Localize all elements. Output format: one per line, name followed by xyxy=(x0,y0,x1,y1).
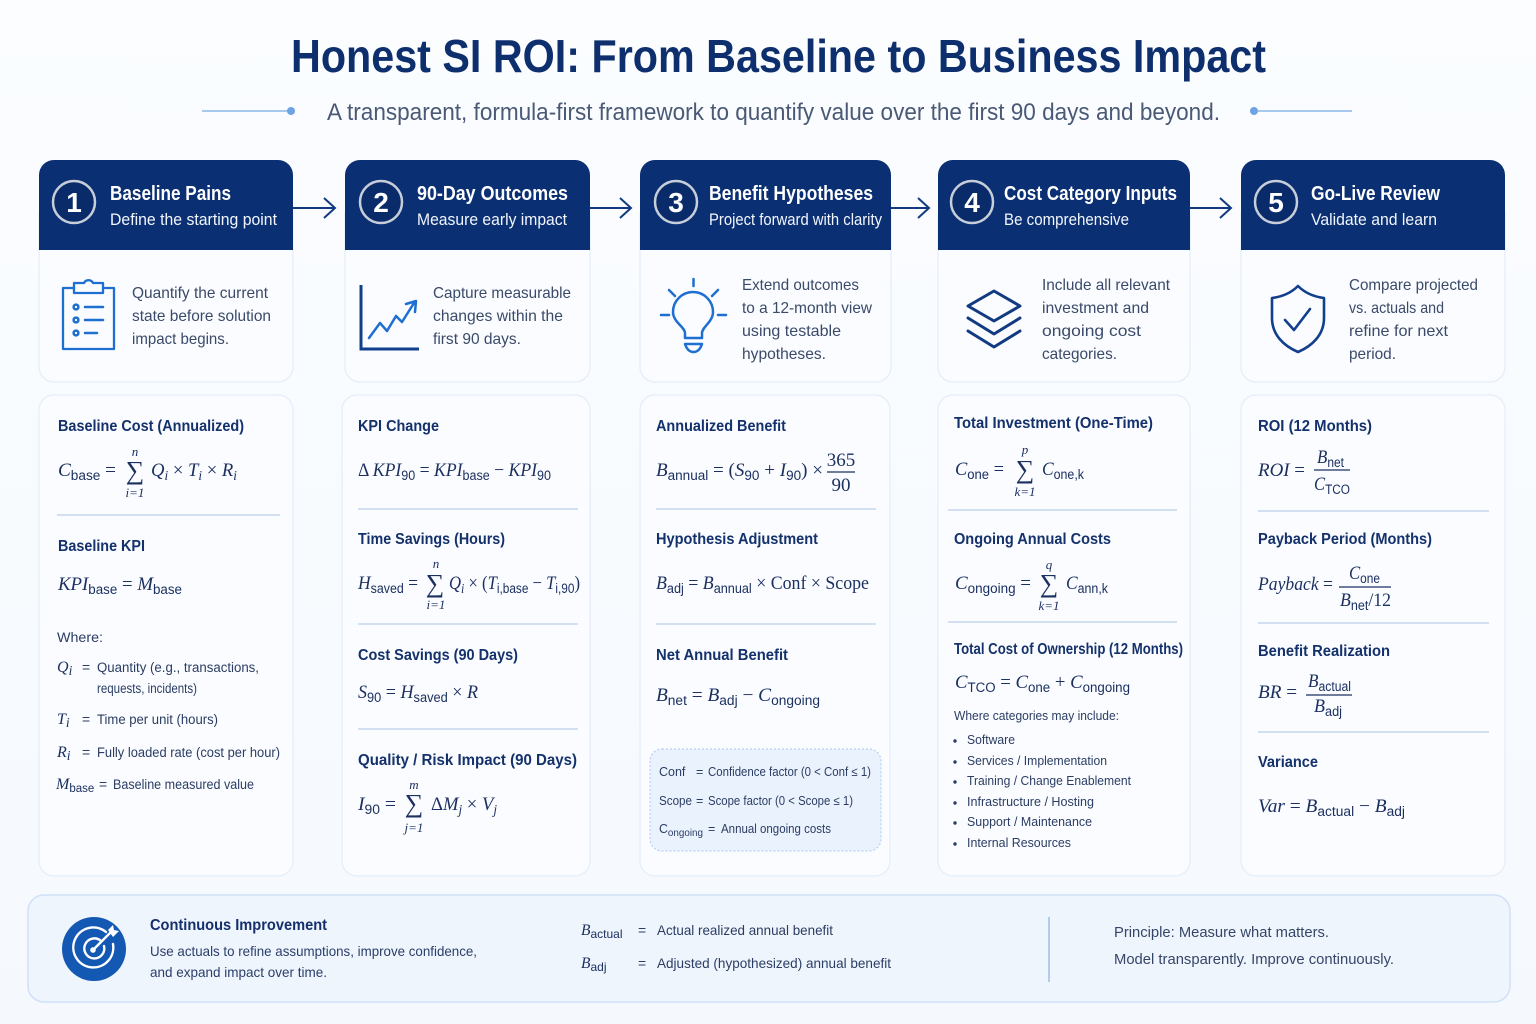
step 2 heading: 90-Day Outcomes xyxy=(417,183,568,205)
step 5 description xyxy=(1349,277,1478,363)
definitions list: i xyxy=(66,715,70,730)
formula: variance: adj xyxy=(1387,804,1405,819)
callout: factor definitions: Scope factor (0 < Scope ≤ 1) xyxy=(708,794,853,808)
formula: KPI change: 90 xyxy=(537,468,551,483)
category list: Where categories may include: xyxy=(954,709,1119,723)
step 5 description: refine for next xyxy=(1349,323,1449,340)
footer heading: Continuous Improvement xyxy=(150,917,327,934)
heading: Variance: Variance xyxy=(1258,754,1318,771)
icon: light bulb xyxy=(661,279,726,352)
heading: Total Cost of Ownership: Total Cost of Ownership (12 Months) xyxy=(954,641,1183,658)
formula: total investment: p xyxy=(1021,442,1029,457)
step 4 description xyxy=(1042,277,1171,363)
step 4 description: categories. xyxy=(1042,346,1117,363)
category list xyxy=(953,709,1132,850)
callout: factor definitions: ongoing xyxy=(668,828,703,839)
formula: hypothesis adjustment: = xyxy=(684,573,703,594)
formula: total cost of ownership: one xyxy=(1028,680,1050,695)
formula: time savings: Q xyxy=(449,573,461,594)
formula: baseline cost: i=1 xyxy=(126,485,144,500)
formula: baseline cost: base xyxy=(71,468,100,483)
footer legend: = xyxy=(638,922,646,938)
formula: net annual benefit: C xyxy=(758,685,771,706)
step 3 description: to a 12-month view xyxy=(742,300,872,317)
formula: time savings: H xyxy=(357,573,372,594)
step 2 card: 90-Day Outcomes xyxy=(345,160,590,382)
step 4 description: investment and xyxy=(1042,300,1149,317)
definitions list: M xyxy=(55,776,71,793)
formula: cost savings: saved xyxy=(414,690,448,705)
formula: benefit realization: B xyxy=(1308,671,1319,692)
formula: ongoing annual costs: ann,k xyxy=(1078,581,1108,596)
category list: Software xyxy=(967,733,1015,747)
formula: time savings: T xyxy=(488,573,498,594)
formula: annualized benefit: B xyxy=(656,460,668,481)
formula: baseline cost: Q xyxy=(151,460,165,481)
formula: ongoing annual costs: ongoing xyxy=(968,581,1016,596)
formula: ROI: B xyxy=(1317,447,1328,468)
formula: quality risk impact: m xyxy=(409,777,419,792)
panel: cost formulas xyxy=(938,395,1190,876)
definitions list: Time per unit (hours) xyxy=(97,712,218,727)
formula: baseline cost: n xyxy=(132,444,138,459)
step 1 description: state before solution xyxy=(132,308,271,325)
formula: total cost of ownership: = xyxy=(996,672,1016,693)
formula: ongoing annual costs: k=1 xyxy=(1038,598,1060,613)
formula: total investment: C xyxy=(955,459,968,480)
step 1 description: Quantify the current xyxy=(132,285,269,302)
formula: baseline KPI: M xyxy=(136,574,154,595)
formula: cost savings: S xyxy=(358,682,367,703)
definitions list: Q xyxy=(57,659,69,676)
step 3 description: Extend outcomes xyxy=(742,277,859,294)
formula: cost savings: H xyxy=(400,682,415,703)
formula: total investment xyxy=(955,442,1084,499)
formula: net annual benefit: − xyxy=(738,685,758,706)
formula: KPI change: KPI xyxy=(508,460,539,481)
formula: ROI: C xyxy=(1314,474,1325,495)
definitions list: Quantity (e.g., transactions, xyxy=(97,660,259,675)
formula: time savings: i=1 xyxy=(427,597,445,612)
footer description: Use actuals to refine assumptions, improve confidence, xyxy=(150,943,477,959)
heading: Cost Savings: Cost Savings (90 Days) xyxy=(358,647,518,664)
formula: annualized benefit: I xyxy=(779,460,788,481)
formula: ongoing annual costs: = xyxy=(1016,573,1031,594)
arrow 2 to 3 xyxy=(590,198,631,218)
formula: payback: one xyxy=(1360,571,1380,586)
formula: time savings: i,90 xyxy=(555,581,574,596)
panel: 90-day formulas xyxy=(342,395,590,876)
formula: baseline cost: C xyxy=(58,460,71,481)
number badge 4: 4 xyxy=(964,187,980,218)
formula: benefit realization xyxy=(1258,671,1352,719)
arrow 1 to 2 xyxy=(293,198,335,218)
formula: annualized benefit: annual xyxy=(668,468,708,483)
formula: annualized benefit: = ( xyxy=(708,460,735,481)
definitions list: = xyxy=(82,659,90,675)
formula: total investment: k=1 xyxy=(1014,484,1036,499)
formula: benefit realization: adj xyxy=(1325,704,1342,719)
formula: payback xyxy=(1257,563,1391,613)
formula: benefit realization: B xyxy=(1314,696,1325,717)
formula: ongoing annual costs: C xyxy=(955,573,968,594)
step 1 heading: Baseline Pains xyxy=(110,183,231,205)
step 4 card: Cost Category Inputs xyxy=(938,160,1190,382)
formula: payback: net xyxy=(1351,598,1369,613)
principle statement: Principle: Measure what matters. xyxy=(1114,924,1329,941)
number badge 4 xyxy=(951,181,993,223)
step 1 description xyxy=(132,285,271,348)
formula: baseline cost: i xyxy=(198,468,202,483)
category list: Training / Change Enablement xyxy=(967,774,1132,788)
definitions list: = xyxy=(99,776,107,792)
formula: KPI change: = xyxy=(415,460,434,481)
footer legend: B xyxy=(581,922,591,939)
formula: time savings: T xyxy=(546,573,557,594)
step 5 description: period. xyxy=(1349,346,1396,363)
footer legend: Actual realized annual benefit xyxy=(657,922,833,938)
formula: quality risk impact: V xyxy=(482,794,496,815)
definitions list: T xyxy=(57,711,67,728)
formula: cost savings: = xyxy=(381,682,401,703)
formula: net annual benefit: B xyxy=(707,685,720,706)
definitions list xyxy=(55,629,280,795)
formula: time savings: × ( xyxy=(464,573,488,594)
formula: variance: actual xyxy=(1317,804,1354,819)
formula: KPI change: KPI xyxy=(433,460,464,481)
formula: annualized benefit: 90 xyxy=(744,468,759,483)
step 5 heading: Go-Live Review xyxy=(1311,183,1440,205)
formula: benefit realization: BR = xyxy=(1258,682,1297,703)
step 2 description: Capture measurable xyxy=(433,285,571,302)
formula: baseline KPI: KPI xyxy=(57,574,90,595)
formula: annualized benefit: 90 xyxy=(786,468,801,483)
formula: KPI change: − xyxy=(490,460,509,481)
callout: factor definitions: = xyxy=(696,794,703,808)
step 5 subheading: Validate and learn xyxy=(1311,211,1437,229)
callout: factor definitions: Scope xyxy=(659,794,692,808)
number badge 3 xyxy=(655,181,697,223)
formula: KPI change: Δ KPI xyxy=(358,460,403,481)
formula: cost savings: 90 xyxy=(367,690,381,705)
icon: rising line chart xyxy=(361,285,419,349)
heading: Ongoing Annual Costs: Ongoing Annual Costs xyxy=(954,531,1111,548)
formula: payback: /12 xyxy=(1368,590,1391,611)
formula: total cost of ownership: TCO xyxy=(968,680,996,695)
formula: cost savings: R xyxy=(466,682,478,703)
formula: baseline KPI: base xyxy=(153,582,182,597)
formula: hypothesis adjustment: B xyxy=(656,573,667,594)
formula: net annual benefit: B xyxy=(656,685,668,706)
formula: total cost of ownership: + xyxy=(1050,672,1070,693)
formula: baseline cost: × xyxy=(168,460,188,481)
formula: ROI: ROI = xyxy=(1257,460,1305,481)
formula: baseline cost: × xyxy=(202,460,222,481)
formula: baseline KPI: = xyxy=(117,574,137,595)
formula: time savings: ∑ xyxy=(426,569,444,598)
formula: baseline cost: i xyxy=(233,468,237,483)
formula: quality risk impact: = xyxy=(380,794,396,815)
definitions list: R xyxy=(56,744,67,761)
callout: factor definitions: C xyxy=(659,822,668,836)
formula: ongoing annual costs xyxy=(955,557,1108,613)
formula: annualized benefit: 365 xyxy=(827,450,855,471)
formula: payback: C xyxy=(1349,563,1360,584)
heading: KPI Change: KPI Change xyxy=(358,418,439,435)
formula: payback: B xyxy=(1340,590,1351,611)
icon: target with arrow xyxy=(62,917,126,981)
formula: quality risk impact: × xyxy=(462,794,482,815)
formula: annualized benefit: S xyxy=(735,460,745,481)
callout: factor definitions: Confidence factor (0 < Conf ≤ 1) xyxy=(708,765,871,779)
formula: total cost of ownership: ongoing xyxy=(1083,680,1130,695)
formula: net annual benefit: adj xyxy=(719,693,738,708)
step 3 description: hypotheses. xyxy=(742,346,826,363)
panel: benefit formulas xyxy=(640,395,890,876)
heading: Baseline Cost: Baseline Cost (Annualized) xyxy=(58,418,244,435)
footer description: and expand impact over time. xyxy=(150,964,327,980)
step 5 card: Go-Live Review xyxy=(1241,160,1505,382)
definitions list: Where: xyxy=(57,629,103,645)
category list: Support / Maintenance xyxy=(967,815,1092,829)
formula: time savings: saved xyxy=(371,581,404,596)
principle statement: Model transparently. Improve continuously. xyxy=(1114,951,1394,968)
formula: total investment: one xyxy=(967,467,989,482)
step 4 heading: Cost Category Inputs xyxy=(1004,183,1177,205)
definitions list: Baseline measured value xyxy=(113,777,254,792)
formula: quality risk impact xyxy=(357,777,497,835)
formula: ongoing annual costs: C xyxy=(1066,573,1078,594)
footer legend: Adjusted (hypothesized) annual benefit xyxy=(657,955,891,971)
formula: baseline cost: T xyxy=(188,460,200,481)
step 3 subheading: Project forward with clarity xyxy=(709,211,883,229)
number badge 3: 3 xyxy=(668,187,684,218)
step 3 card: Benefit Hypotheses xyxy=(640,160,891,382)
step 5 description: Compare projected xyxy=(1349,277,1478,294)
formula: annualized benefit: ) × xyxy=(801,460,823,481)
formula: ROI: TCO xyxy=(1325,482,1350,497)
formula: time savings: i,base xyxy=(497,581,528,596)
formula: variance: B xyxy=(1375,796,1387,817)
formula: time savings: n xyxy=(433,556,439,571)
heading: Annualized Benefit: Annualized Benefit xyxy=(656,418,787,435)
step 1 card: Baseline Pains xyxy=(39,160,293,382)
formula: baseline cost: = xyxy=(100,460,116,481)
formula: hypothesis adjustment: adj xyxy=(667,581,684,596)
footer legend: adj xyxy=(590,960,606,974)
formula: baseline KPI: base xyxy=(88,582,117,597)
subtitle: A transparent, formula-first framework to quantify value over the first 90 days and beyond. xyxy=(327,99,1220,126)
heading: Payback Period: Payback Period (Months) xyxy=(1258,531,1432,548)
formula: hypothesis adjustment: × Conf × Scope xyxy=(752,573,869,594)
formula: ROI: net xyxy=(1327,455,1344,470)
number badge 2 xyxy=(360,181,402,223)
footer legend: actual xyxy=(590,927,622,941)
category list: Infrastructure / Hosting xyxy=(967,795,1094,809)
step 2 description: changes within the xyxy=(433,308,563,325)
formula: annualized benefit xyxy=(656,450,855,496)
formula: baseline cost: ∑ xyxy=(126,456,144,485)
definitions list: = xyxy=(82,744,90,760)
formula: cost savings: × xyxy=(448,682,467,703)
formula: ROI xyxy=(1257,447,1350,497)
formula: hypothesis adjustment: annual xyxy=(714,581,752,596)
formula: net annual benefit: ongoing xyxy=(771,693,820,708)
formula: ongoing annual costs: ∑ xyxy=(1040,569,1058,598)
formula: baseline cost: R xyxy=(221,460,234,481)
formula: baseline cost xyxy=(58,444,237,500)
formula: annualized benefit: + xyxy=(759,460,780,481)
formula: KPI change: base xyxy=(463,468,490,483)
formula: total cost of ownership: C xyxy=(1016,672,1028,693)
callout: factor definitions: = xyxy=(696,765,703,779)
number badge 1: 1 xyxy=(66,187,82,218)
heading: Hypothesis Adjustment: Hypothesis Adjustment xyxy=(656,531,819,548)
heading: Baseline KPI: Baseline KPI xyxy=(58,538,145,555)
number badge 2: 2 xyxy=(373,187,389,218)
step 4 description: Include all relevant xyxy=(1042,277,1171,294)
formula: quality risk impact: ∑ xyxy=(405,789,423,818)
formula: quality risk impact: I xyxy=(357,794,366,815)
formula: total cost of ownership: C xyxy=(1070,672,1083,693)
number badge 1 xyxy=(53,181,95,223)
formula: ongoing annual costs: q xyxy=(1046,557,1053,572)
footer description xyxy=(150,943,477,980)
footer legend: B xyxy=(581,955,591,972)
title: Honest SI ROI: From Baseline to Business Impact xyxy=(291,30,1266,82)
definitions list: i xyxy=(67,748,71,763)
formula: KPI change: 90 xyxy=(401,468,415,483)
footer banner: continuous improvement xyxy=(28,895,1510,1002)
step 3 heading: Benefit Hypotheses xyxy=(709,183,873,205)
heading: Time Savings: Time Savings (Hours) xyxy=(358,531,505,548)
step 1 description: impact begins. xyxy=(132,331,229,348)
heading: Net Annual Benefit: Net Annual Benefit xyxy=(656,647,789,664)
formula: benefit realization: actual xyxy=(1318,679,1351,694)
footer legend xyxy=(581,922,891,974)
formula: time savings: i xyxy=(461,581,465,596)
formula: variance: − xyxy=(1354,796,1375,817)
step 3 description xyxy=(742,277,872,363)
formula: annualized benefit: 90 xyxy=(832,475,850,496)
formula: total cost of ownership: C xyxy=(955,672,968,693)
icon: shield with check xyxy=(1272,286,1324,352)
step 4 subheading: Be comprehensive xyxy=(1004,211,1129,229)
icon: clipboard checklist xyxy=(63,280,114,349)
heading: ROI: ROI (12 Months) xyxy=(1258,418,1372,435)
formula: net annual benefit: net xyxy=(668,693,687,708)
definitions list: Fully loaded rate (cost per hour) xyxy=(97,745,280,760)
formula: total investment: = xyxy=(989,459,1004,480)
step 2 subheading: Measure early impact xyxy=(417,211,567,229)
arrow 3 to 4 xyxy=(891,198,929,218)
heading: Benefit Realization: Benefit Realization xyxy=(1258,643,1390,660)
formula: total investment: one,k xyxy=(1054,467,1084,482)
definitions list: i xyxy=(69,663,73,678)
formula: payback: Payback = xyxy=(1257,574,1333,595)
formula: total investment: ∑ xyxy=(1016,455,1034,484)
formula: time savings: = xyxy=(404,573,418,594)
formula: variance: Var = B xyxy=(1258,796,1317,817)
arrow 4 to 5 xyxy=(1190,198,1231,218)
step 2 description: first 90 days. xyxy=(433,331,521,348)
callout: factor definitions: Conf xyxy=(659,765,686,779)
callout: factor definitions: = xyxy=(708,822,715,836)
heading: Total Investment: Total Investment (One-Time) xyxy=(954,415,1153,432)
step 1 subheading: Define the starting point xyxy=(110,211,277,229)
formula: time savings xyxy=(357,556,580,612)
panel: review formulas xyxy=(1241,395,1505,876)
step 4 description: ongoing cost xyxy=(1042,323,1142,340)
category list: Internal Resources xyxy=(967,836,1071,850)
formula: total investment: C xyxy=(1042,459,1054,480)
number badge 5 xyxy=(1255,181,1297,223)
formula: time savings: ) xyxy=(574,573,580,594)
panel: baseline formulas xyxy=(39,395,293,876)
formula: quality risk impact: 90 xyxy=(365,802,380,817)
heading: Quality / Risk Impact: Quality / Risk Impact (90 Days) xyxy=(358,752,577,769)
formula: quality risk impact: ΔM xyxy=(431,794,459,815)
formula: quality risk impact: j xyxy=(491,802,497,817)
step 3 description: using testable xyxy=(742,323,841,340)
formula: time savings: − xyxy=(528,573,546,594)
definitions list: requests, incidents) xyxy=(97,681,197,696)
callout: factor definitions xyxy=(650,749,881,851)
principle statement xyxy=(1114,924,1394,968)
formula: quality risk impact: j=1 xyxy=(403,820,423,835)
definitions list: base xyxy=(69,783,94,795)
callout: factor definitions: Annual ongoing costs xyxy=(721,822,831,836)
number badge 5: 5 xyxy=(1268,187,1284,218)
formula: net annual benefit: = xyxy=(687,685,707,706)
step 2 description xyxy=(433,285,571,348)
definitions list: = xyxy=(82,711,90,727)
formula: quality risk impact: j xyxy=(457,802,462,817)
category list: Services / Implementation xyxy=(967,754,1107,768)
icon: stacked layers xyxy=(968,291,1020,347)
formula: baseline cost: i xyxy=(164,468,168,483)
formula: hypothesis adjustment: B xyxy=(703,573,714,594)
step 5 description: vs. actuals and xyxy=(1349,300,1444,317)
footer legend: = xyxy=(638,955,646,971)
